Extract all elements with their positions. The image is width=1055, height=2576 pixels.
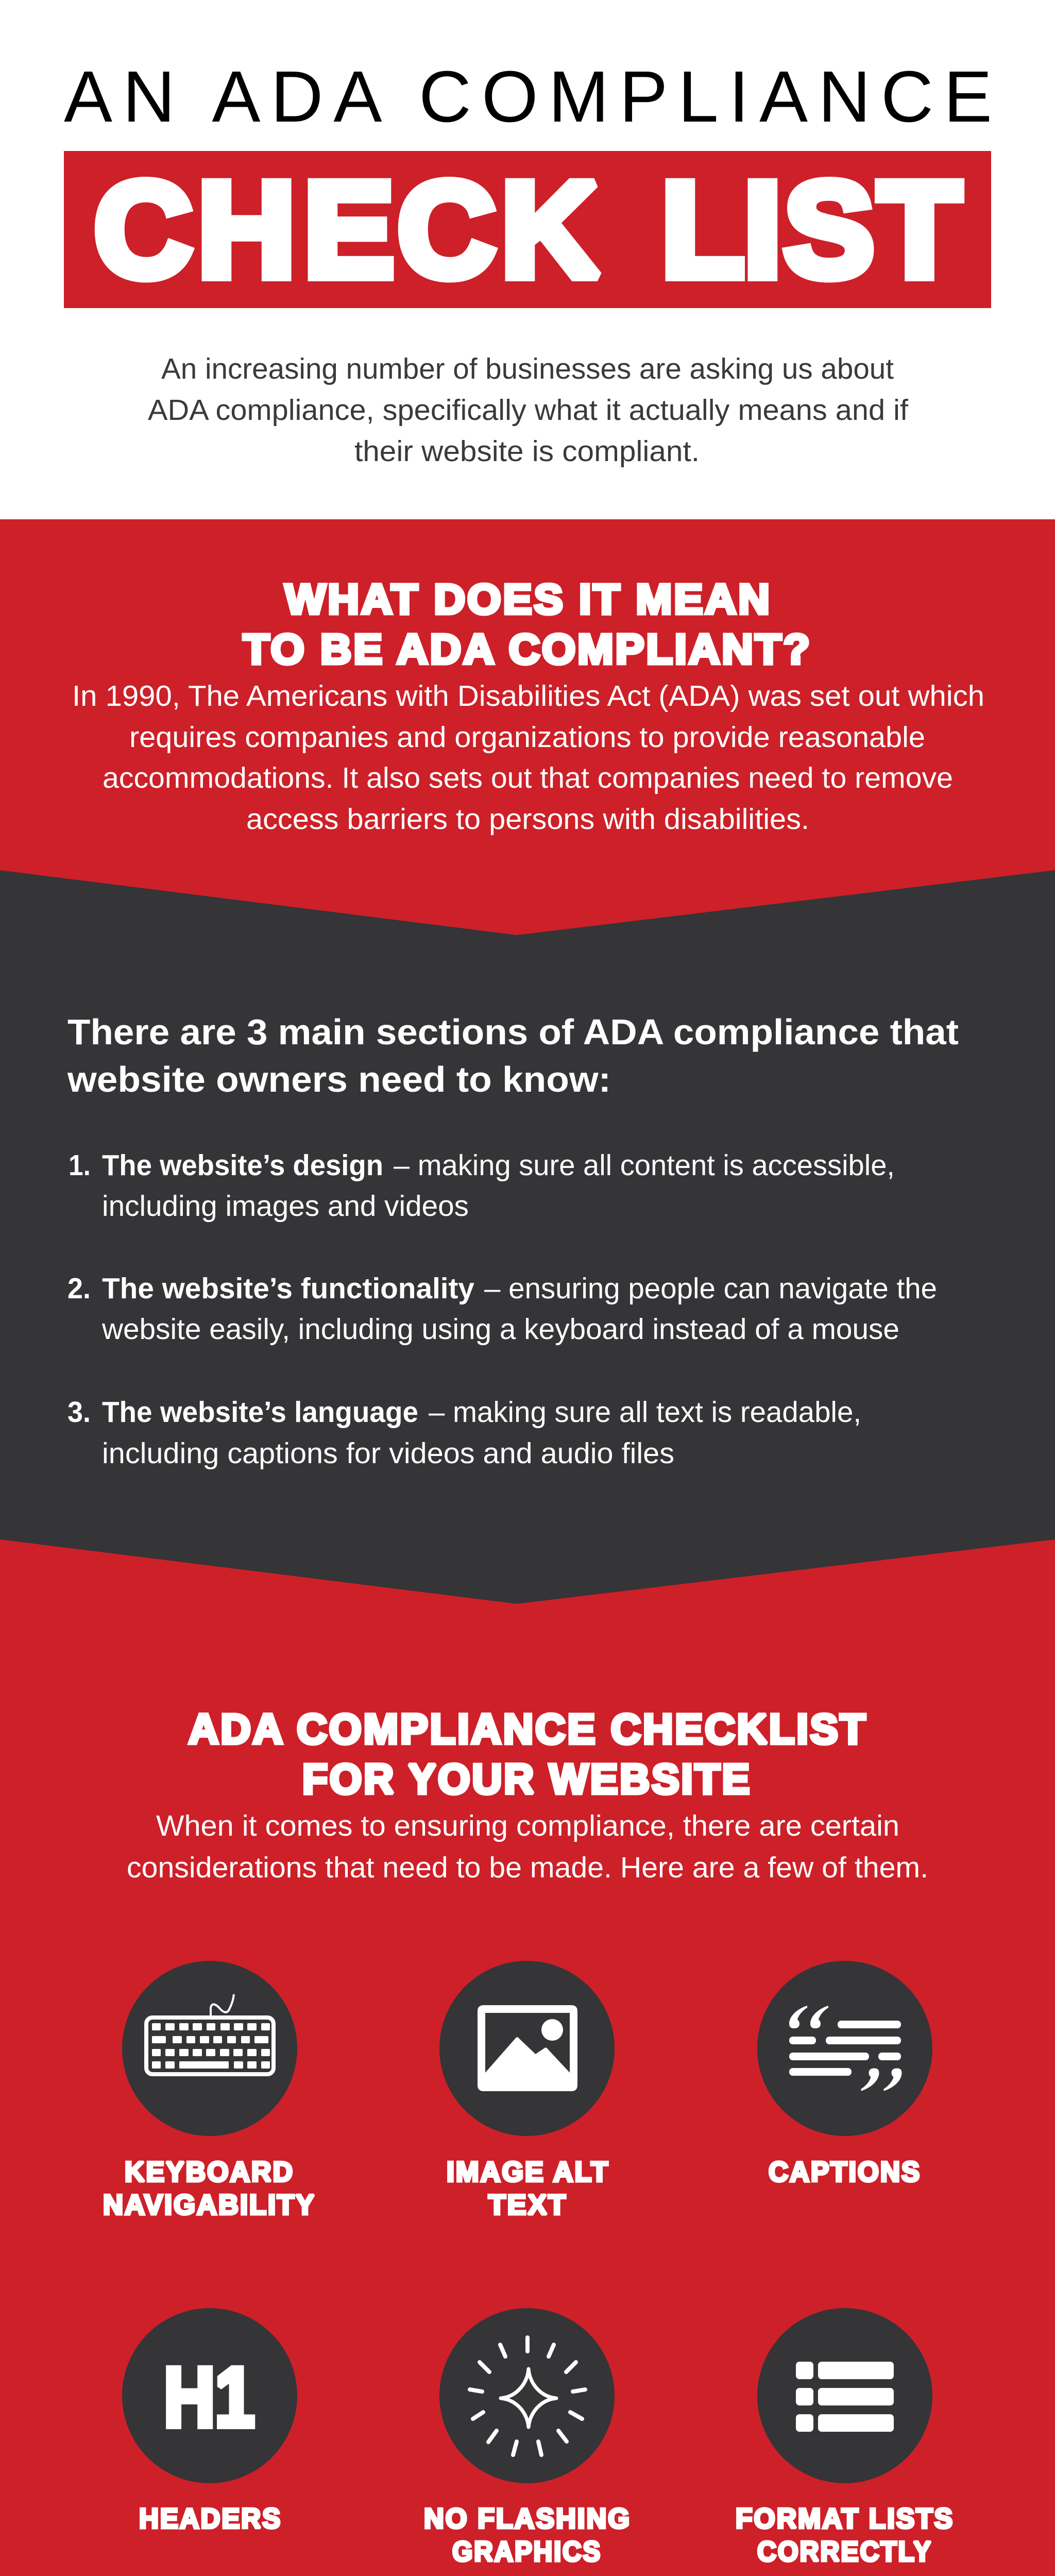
list item 1: including images and videos: [102, 1190, 469, 1223]
item: headers: [122, 2308, 297, 2534]
body text: In 1990, The Americans with Disabilities Act (ADA) was set out which: [72, 680, 984, 713]
icon: captions: [789, 2006, 901, 2091]
body text: [72, 680, 984, 836]
checklist intro: considerations that need to be made. Here are a few of them.: [127, 1851, 928, 1884]
body text: accommodations. It also sets out that companies need to remove: [103, 761, 953, 794]
panel: header: [64, 56, 992, 468]
sections heading: There are 3 main sections of ADA compliance that: [67, 1012, 959, 1052]
item: image alt text: [439, 1961, 615, 2221]
title banner: CHECK LIST: [94, 154, 961, 305]
list item 3: – making sure all text is readable,: [429, 1396, 861, 1429]
icon: H1: H1: [164, 2350, 254, 2444]
label: [103, 2156, 316, 2221]
label: FORMAT LISTS: [736, 2502, 954, 2534]
list item 3: The website’s language: [102, 1396, 418, 1429]
heading: WHAT DOES IT MEAN: [285, 576, 772, 623]
label: KEYBOARD: [125, 2156, 294, 2188]
intro text: ADA compliance, specifically what it actually means and if: [148, 394, 908, 427]
label: CAPTIONS: [769, 2156, 921, 2188]
list item 2: – ensuring people can navigate the: [484, 1272, 937, 1305]
heading: [243, 576, 812, 673]
intro text: An increasing number of businesses are asking us about: [161, 352, 894, 385]
label: [447, 2156, 609, 2221]
item: captions: [757, 1961, 932, 2188]
list item 3: including captions for videos and audio files: [102, 1437, 674, 1470]
icon: keyboard: [146, 1994, 274, 2074]
checklist intro: [127, 1809, 928, 1884]
list item 1: [69, 1149, 895, 1223]
checklist intro: When it comes to ensuring compliance, there are certain: [156, 1809, 899, 1842]
body text: requires companies and organizations to provide reasonable: [129, 721, 925, 754]
intro text: their website is compliant.: [354, 435, 700, 468]
heading: TO BE ADA COMPLIANT?: [243, 626, 812, 673]
label: [424, 2502, 631, 2567]
list item 3: [67, 1396, 861, 1470]
item: no flashing graphics: [424, 2308, 631, 2567]
list item 1: The website’s design: [102, 1149, 383, 1182]
list item 2: The website’s functionality: [102, 1272, 474, 1305]
list item 3: 3.: [67, 1396, 91, 1429]
label: TEXT: [488, 2189, 567, 2221]
label: HEADERS: [139, 2502, 282, 2534]
label: IMAGE ALT: [447, 2156, 609, 2188]
item: keyboard navigability: [103, 1961, 316, 2221]
label: NAVIGABILITY: [103, 2189, 316, 2221]
icon: picture: [478, 2005, 577, 2091]
panel: checklist: [100, 1706, 954, 2576]
checklist heading: ADA COMPLIANCE CHECKLIST: [189, 1706, 867, 1753]
list item 2: website easily, including using a keyboard instead of a mouse: [101, 1313, 899, 1346]
sections heading: [67, 1012, 959, 1099]
icon: list: [796, 2362, 894, 2432]
panel: checklist background: [0, 1535, 1055, 2576]
panel: what does it mean: [0, 519, 1055, 935]
label: NO FLASHING: [424, 2502, 631, 2534]
list item 1: – making sure all content is accessible,: [394, 1149, 895, 1182]
panel: three sections: [0, 866, 1055, 1604]
title line: AN ADA COMPLIANCE: [64, 56, 992, 137]
checklist heading: [189, 1706, 867, 1803]
body text: access barriers to persons with disabilities.: [246, 803, 809, 836]
list item 1: 1.: [69, 1149, 91, 1182]
label: GRAPHICS: [452, 2535, 602, 2567]
intro text: [148, 352, 908, 468]
list item 2: 2.: [67, 1272, 91, 1305]
list item 2: [67, 1272, 937, 1346]
label: [736, 2502, 954, 2567]
sections heading: website owners need to know:: [67, 1059, 611, 1099]
checklist heading: FOR YOUR WEBSITE: [302, 1756, 752, 1803]
item: format lists: [736, 2308, 954, 2567]
icon: sparkle: [470, 2337, 585, 2455]
label: CORRECTLY: [757, 2535, 932, 2567]
